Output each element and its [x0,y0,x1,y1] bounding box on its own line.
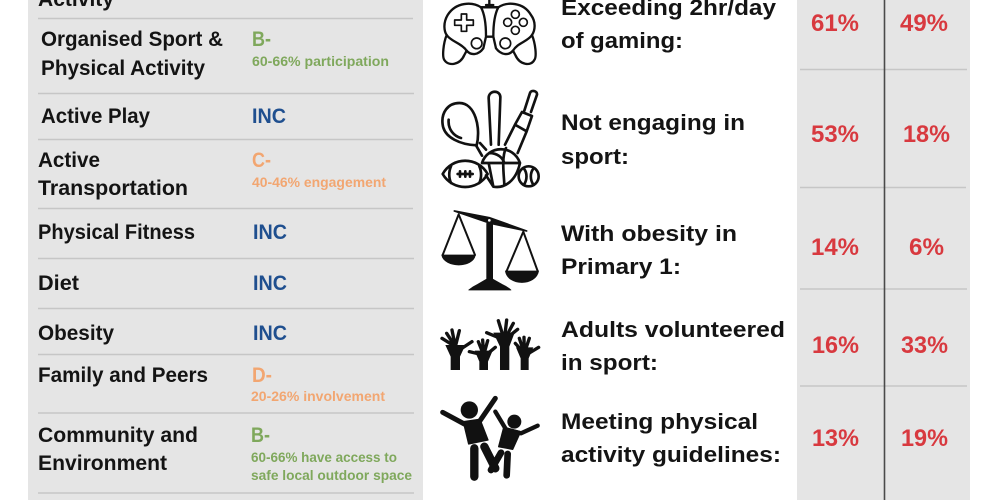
row: organised sport and physical activity: Physical Activity [41,57,205,80]
values: volunteering: 33% [901,332,948,359]
panel: percentage comparison table [797,0,970,500]
values: not engaging in sport [811,121,950,148]
label: not engaging in sport: Not engaging in [561,110,745,135]
label: adults volunteered: Adults volunteered [561,317,785,342]
row: obesity [38,322,287,345]
values: volunteering [812,332,948,359]
row: community and environment [38,424,412,483]
row: active transportation: Transportation [38,177,188,200]
label: not engaging in sport [561,110,745,169]
values: not engaging in sport: 18% [903,121,950,148]
row: physical fitness [38,221,287,244]
label: meeting guidelines [561,409,781,467]
icon: sports equipment [442,91,539,187]
row: active transportation: 40-46% engagement [252,175,387,190]
label: obesity in primary 1: Primary 1: [561,254,681,279]
values: physical activity guidelines [812,425,948,452]
row: family and peers [38,364,386,404]
row: community and environment: B- [251,424,270,447]
icon: balance scales [442,211,539,290]
row: organised sport and physical activity: Organised Sport & [41,28,223,51]
row: active play: INC [252,105,286,128]
label: exceeding gaming: of gaming: [561,28,683,53]
row: diet [38,272,287,295]
row: family and peers: Family and Peers [38,364,208,387]
row: active play: Active Play [41,105,150,128]
label: meeting guidelines: activity guidelines: [561,442,781,467]
row: organised sport and physical activity: 60-66% participation [252,54,389,69]
values: gaming: 49% [900,10,948,37]
row: obesity: INC [253,322,287,345]
label: adults volunteered [561,317,785,375]
values: obesity: 6% [909,234,944,261]
row: diet: Diet [38,272,79,295]
values: gaming [811,10,948,37]
row: active transportation: Active [38,149,100,172]
label: obesity in primary 1: With obesity in [561,221,737,246]
row: active play [41,105,286,128]
label: adults volunteered: in sport: [561,350,658,375]
row: obesity: Obesity [38,322,114,345]
values: not engaging in sport: 53% [811,121,859,148]
row: community and environment: 60-66% have access to [251,450,397,465]
row: organised sport and physical activity: B- [252,28,271,51]
row: community and environment: safe local outdoor space [251,468,412,483]
panel: report card grades [28,0,423,500]
values: obesity [811,234,944,261]
row: physical fitness: Physical Fitness [38,221,195,244]
icon: jumping people [443,398,538,477]
table background [797,0,970,500]
values: gaming: 61% [811,10,859,37]
icon: game controller [443,0,536,64]
row: community and environment: Community and [38,424,198,447]
row: active transportation: C- [252,149,271,172]
row: family and peers: D- [252,364,272,387]
label: not engaging in sport: sport: [561,144,629,169]
row: family and peers: 20-26% involvement [251,389,386,404]
row: diet: INC [253,272,287,295]
label: meeting guidelines: Meeting physical [561,409,758,434]
label: exceeding gaming [561,0,777,53]
values: physical activity guidelines: 19% [901,425,948,452]
panel background [28,0,423,500]
values: obesity: 14% [811,234,859,261]
label: obesity in primary 1 [561,221,737,279]
row: community and environment: Environment [38,452,167,475]
icon: raised hands [442,320,539,370]
values: volunteering: 16% [812,332,859,359]
row: active transportation [38,149,387,200]
row: physical fitness: INC [253,221,287,244]
values: physical activity guidelines: 13% [812,425,859,452]
row: organised sport and physical activity [41,28,389,80]
